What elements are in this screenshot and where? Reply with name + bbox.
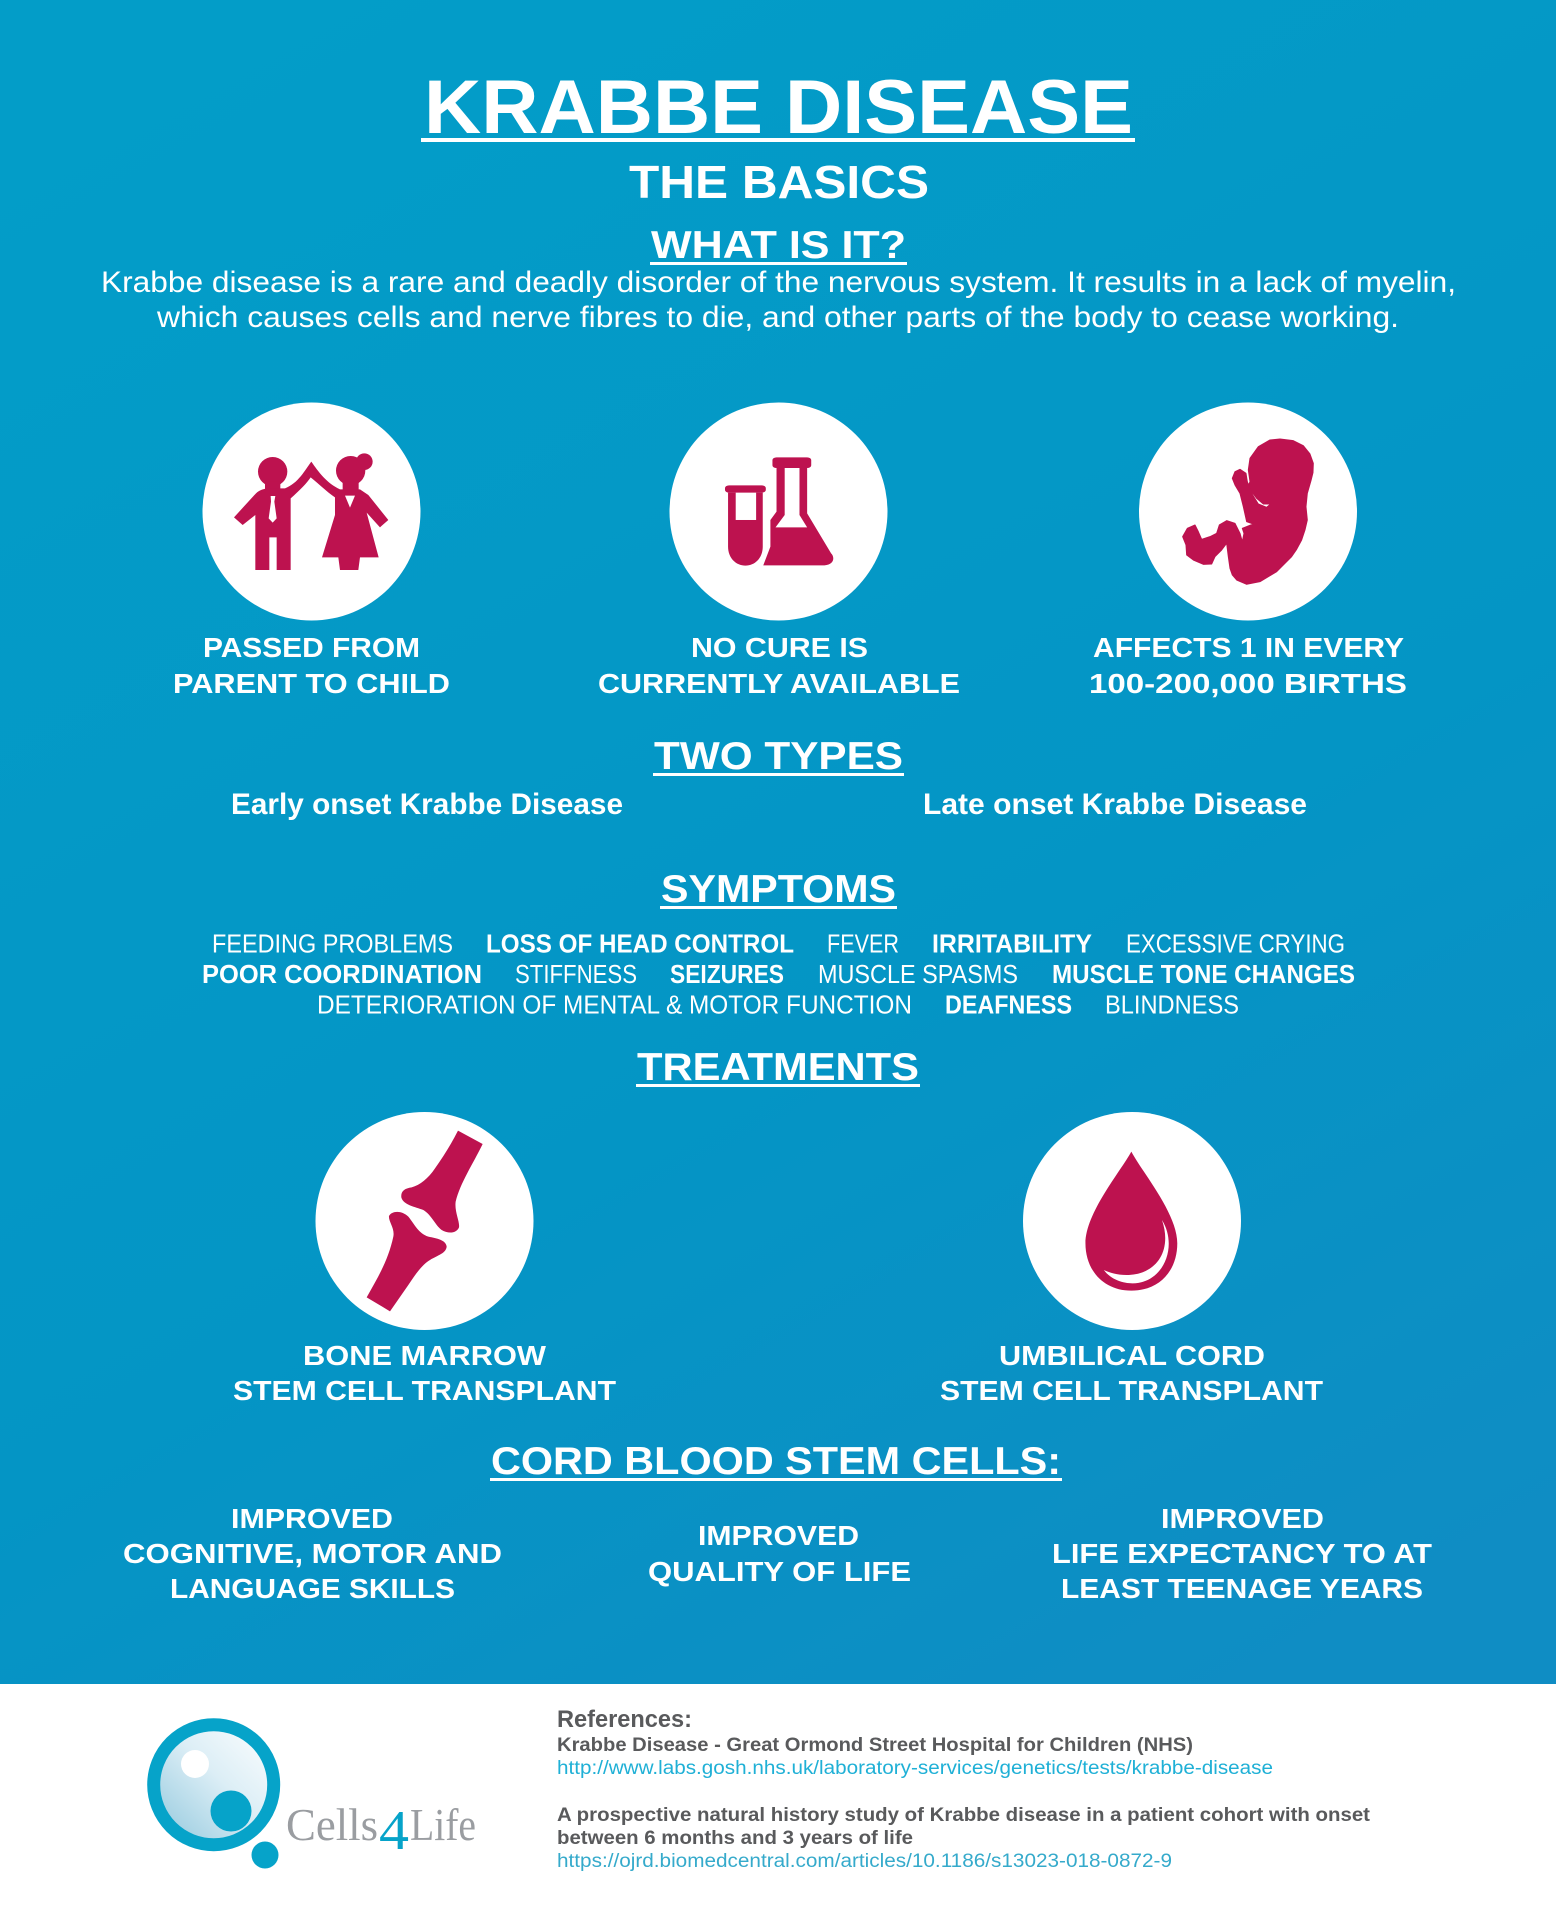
text block: symptoms list: SEIZURES bbox=[670, 959, 784, 989]
text block: symptoms list: STIFFNESS bbox=[515, 959, 637, 989]
icon: blood drop bbox=[1085, 1152, 1177, 1291]
text block: references: http://www.labs.gosh.nhs.uk/laboratory-services/genetics/tests/krabbe-disease bbox=[557, 1758, 1273, 1779]
label bbox=[233, 1340, 616, 1406]
label: UMBILICAL CORD bbox=[999, 1340, 1265, 1371]
text block: symptoms list: EXCESSIVE CRYING bbox=[1126, 928, 1345, 958]
benefit: cognitive, motor and language: IMPROVED bbox=[231, 1503, 393, 1534]
label bbox=[173, 632, 450, 699]
text block: symptoms list: FEVER bbox=[827, 928, 899, 958]
text block: references: Krabbe Disease - Great Ormond Street Hospital for Children (NHS) bbox=[557, 1735, 1193, 1756]
panel: umbilical cord transplant bbox=[940, 1112, 1323, 1406]
text block: symptoms list: DEAFNESS bbox=[945, 990, 1072, 1020]
benefit: life expectancy: LEAST TEENAGE YEARS bbox=[1061, 1573, 1423, 1604]
heading: cord blood stem cells: CORD BLOOD STEM CELLS: bbox=[491, 1440, 1061, 1483]
subtitle: THE BASICS bbox=[629, 156, 929, 208]
label: PARENT TO CHILD bbox=[173, 668, 450, 699]
label: NO CURE IS bbox=[691, 632, 868, 663]
text block: references: References: bbox=[557, 1706, 692, 1733]
label: PASSED FROM bbox=[203, 632, 420, 663]
label: BONE MARROW bbox=[303, 1340, 547, 1371]
text block: definition: which causes cells and nerve fibres to die, and other parts of the body to cease working. bbox=[156, 301, 1399, 334]
benefit: life expectancy bbox=[1052, 1503, 1432, 1604]
text block: symptoms list: POOR COORDINATION bbox=[202, 959, 482, 989]
text block: references: between 6 months and 3 years of life bbox=[557, 1828, 913, 1849]
benefit: life expectancy: IMPROVED bbox=[1161, 1503, 1324, 1534]
text block: references: https://ojrd.biomedcentral.com/articles/10.1186/s13023-018-0872-9 bbox=[557, 1851, 1172, 1872]
text block: definition: Krabbe disease is a rare and deadly disorder of the nervous system. It results in a lack of myelin, bbox=[101, 266, 1456, 299]
panel: bone marrow transplant bbox=[233, 1112, 616, 1406]
benefit: cognitive, motor and language bbox=[123, 1503, 502, 1604]
benefit: cognitive, motor and language: COGNITIVE, MOTOR AND bbox=[123, 1538, 502, 1569]
text block: definition bbox=[101, 266, 1456, 334]
logo: Cells4Life bbox=[154, 1725, 476, 1868]
title: KRABBE DISEASE bbox=[424, 65, 1133, 150]
icon: bone joint bbox=[367, 1131, 483, 1311]
panel: white footer bbox=[0, 1684, 1556, 1927]
panel: no cure bbox=[598, 402, 960, 699]
label bbox=[940, 1340, 1323, 1406]
text block: symptoms list: FEEDING PROBLEMS bbox=[212, 928, 453, 958]
text block: symptoms list: IRRITABILITY bbox=[932, 928, 1092, 958]
text: early onset type: Early onset Krabbe Disease bbox=[231, 788, 623, 821]
text block: references: A prospective natural history study of Krabbe disease in a patient cohort with onset bbox=[557, 1805, 1371, 1826]
benefit: quality of life bbox=[648, 1520, 911, 1587]
logo: Cells4Life: 4 bbox=[379, 1800, 409, 1862]
heading: two types: TWO TYPES bbox=[654, 735, 903, 778]
benefit: quality of life: IMPROVED bbox=[698, 1520, 859, 1551]
text block: symptoms list: LOSS OF HEAD CONTROL bbox=[486, 928, 794, 958]
icon: fetus bbox=[1183, 439, 1313, 584]
label: STEM CELL TRANSPLANT bbox=[233, 1375, 616, 1406]
text block: references bbox=[557, 1706, 1371, 1872]
benefit: quality of life: QUALITY OF LIFE bbox=[648, 1556, 911, 1587]
label: 100-200,000 BIRTHS bbox=[1089, 668, 1407, 699]
label: AFFECTS 1 IN EVERY bbox=[1093, 632, 1404, 663]
text block: symptoms list: MUSCLE TONE CHANGES bbox=[1052, 959, 1355, 989]
heading: treatments: TREATMENTS bbox=[637, 1046, 919, 1089]
icon: test tube and flask bbox=[725, 457, 833, 566]
label: CURRENTLY AVAILABLE bbox=[598, 668, 960, 699]
icon: parents bbox=[234, 453, 388, 570]
text: late onset type: Late onset Krabbe Disease bbox=[923, 788, 1307, 821]
label bbox=[1089, 632, 1407, 699]
text block: symptoms list bbox=[202, 928, 1355, 1020]
heading: what is it: WHAT IS IT? bbox=[651, 224, 906, 267]
logo: Cells4Life: Life bbox=[410, 1799, 476, 1850]
panel: passed from parent to child bbox=[173, 402, 450, 699]
benefit: life expectancy: LIFE EXPECTANCY TO AT bbox=[1052, 1538, 1432, 1569]
label: STEM CELL TRANSPLANT bbox=[940, 1375, 1323, 1406]
text block: symptoms list: DETERIORATION OF MENTAL & MOTOR FUNCTION bbox=[317, 990, 912, 1020]
panel: births statistic bbox=[1089, 402, 1407, 699]
benefit: cognitive, motor and language: LANGUAGE SKILLS bbox=[170, 1573, 455, 1604]
text block: symptoms list: MUSCLE SPASMS bbox=[818, 959, 1018, 989]
heading: symptoms: SYMPTOMS bbox=[661, 868, 896, 911]
text block: symptoms list: BLINDNESS bbox=[1105, 990, 1239, 1020]
logo: Cells4Life: Cells bbox=[286, 1799, 378, 1850]
label bbox=[598, 632, 960, 699]
